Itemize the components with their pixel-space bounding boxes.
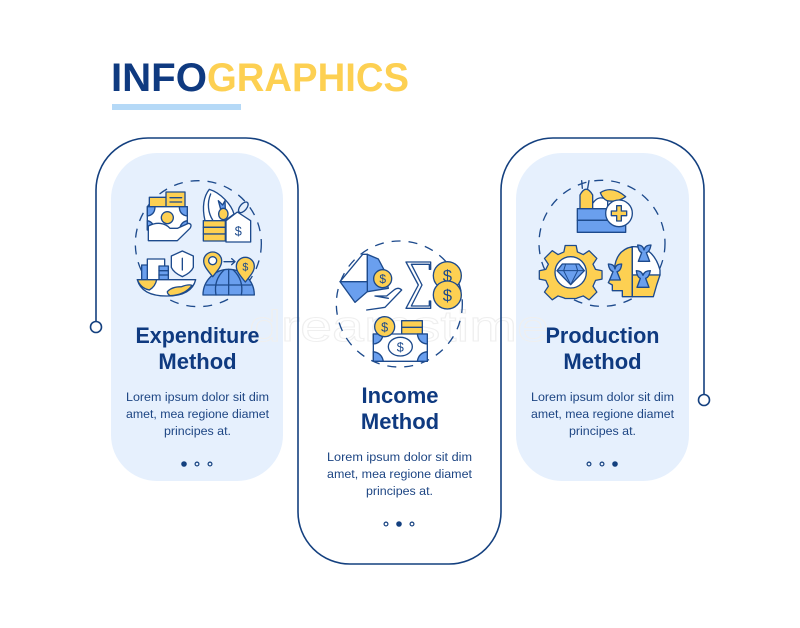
heading: production method	[546, 323, 660, 374]
heading: expenditure method	[136, 323, 260, 374]
text: production body	[531, 390, 675, 438]
text: production body: principes at.	[569, 424, 636, 438]
connecting outline	[90, 138, 710, 564]
text: production body: Lorem ipsum dolor sit dim	[531, 390, 674, 404]
text: income body: Lorem ipsum dolor sit dim	[327, 450, 472, 464]
icon: gear with diamond	[539, 245, 602, 300]
watermark: dreamstime	[249, 302, 549, 351]
icon: head with sprouts	[608, 245, 660, 297]
text: expenditure body: principes at.	[164, 424, 231, 438]
icon: shield and buildings over globe	[137, 251, 196, 296]
text: expenditure body: amet, mea regione diamet	[126, 407, 270, 421]
title: INFO	[111, 56, 207, 100]
text: expenditure body: Lorem ipsum dolor sit dim	[126, 390, 269, 404]
icon: production group	[539, 180, 665, 306]
heading: expenditure method: Method	[158, 349, 237, 374]
icon: dashed ring	[336, 241, 462, 367]
heading: income method: Income	[361, 383, 439, 408]
icon: produce crate with plus	[577, 181, 632, 232]
title: GRAPHICS	[207, 56, 409, 100]
icon: banknote with coin: $	[381, 320, 388, 334]
title	[111, 56, 409, 100]
icon: produce and price tag: $	[235, 225, 242, 239]
icon: location pins over globe: $	[242, 261, 248, 273]
panel: expenditure background	[111, 153, 283, 481]
icon: stacked coins: $	[443, 286, 452, 305]
heading: production method: Method	[563, 349, 642, 374]
icon: pie and coin in hand: $	[379, 272, 386, 286]
heading: production method: Production	[546, 323, 660, 348]
icon: sigma	[406, 262, 431, 308]
icon: expenditure group	[135, 181, 261, 307]
panel: production background	[516, 153, 689, 481]
title underline	[112, 104, 241, 110]
text: income body: amet, mea regione diamet	[327, 467, 473, 481]
heading: income method	[361, 383, 439, 434]
icon: banknote with coin: $	[397, 340, 404, 354]
icon: income group	[336, 241, 462, 367]
icon: dashed ring	[539, 180, 665, 306]
heading: income method: Method	[361, 409, 439, 434]
heading: expenditure method: Expenditure	[136, 323, 260, 348]
icon: dashed ring	[135, 181, 261, 307]
icon: stacked coins: $	[443, 267, 452, 286]
text: production body: amet, mea regione diamet	[531, 407, 675, 421]
text: expenditure body	[126, 390, 270, 438]
pagination dots: first active	[182, 462, 212, 466]
text: income body	[327, 450, 473, 498]
icon: stacked coins	[433, 262, 461, 309]
pagination dots: second active	[384, 522, 414, 526]
pagination dots: third active	[587, 462, 617, 466]
text: income body: principes at.	[366, 484, 433, 498]
icon: money in hand	[147, 192, 191, 241]
icon: banknote with coin	[373, 317, 427, 361]
